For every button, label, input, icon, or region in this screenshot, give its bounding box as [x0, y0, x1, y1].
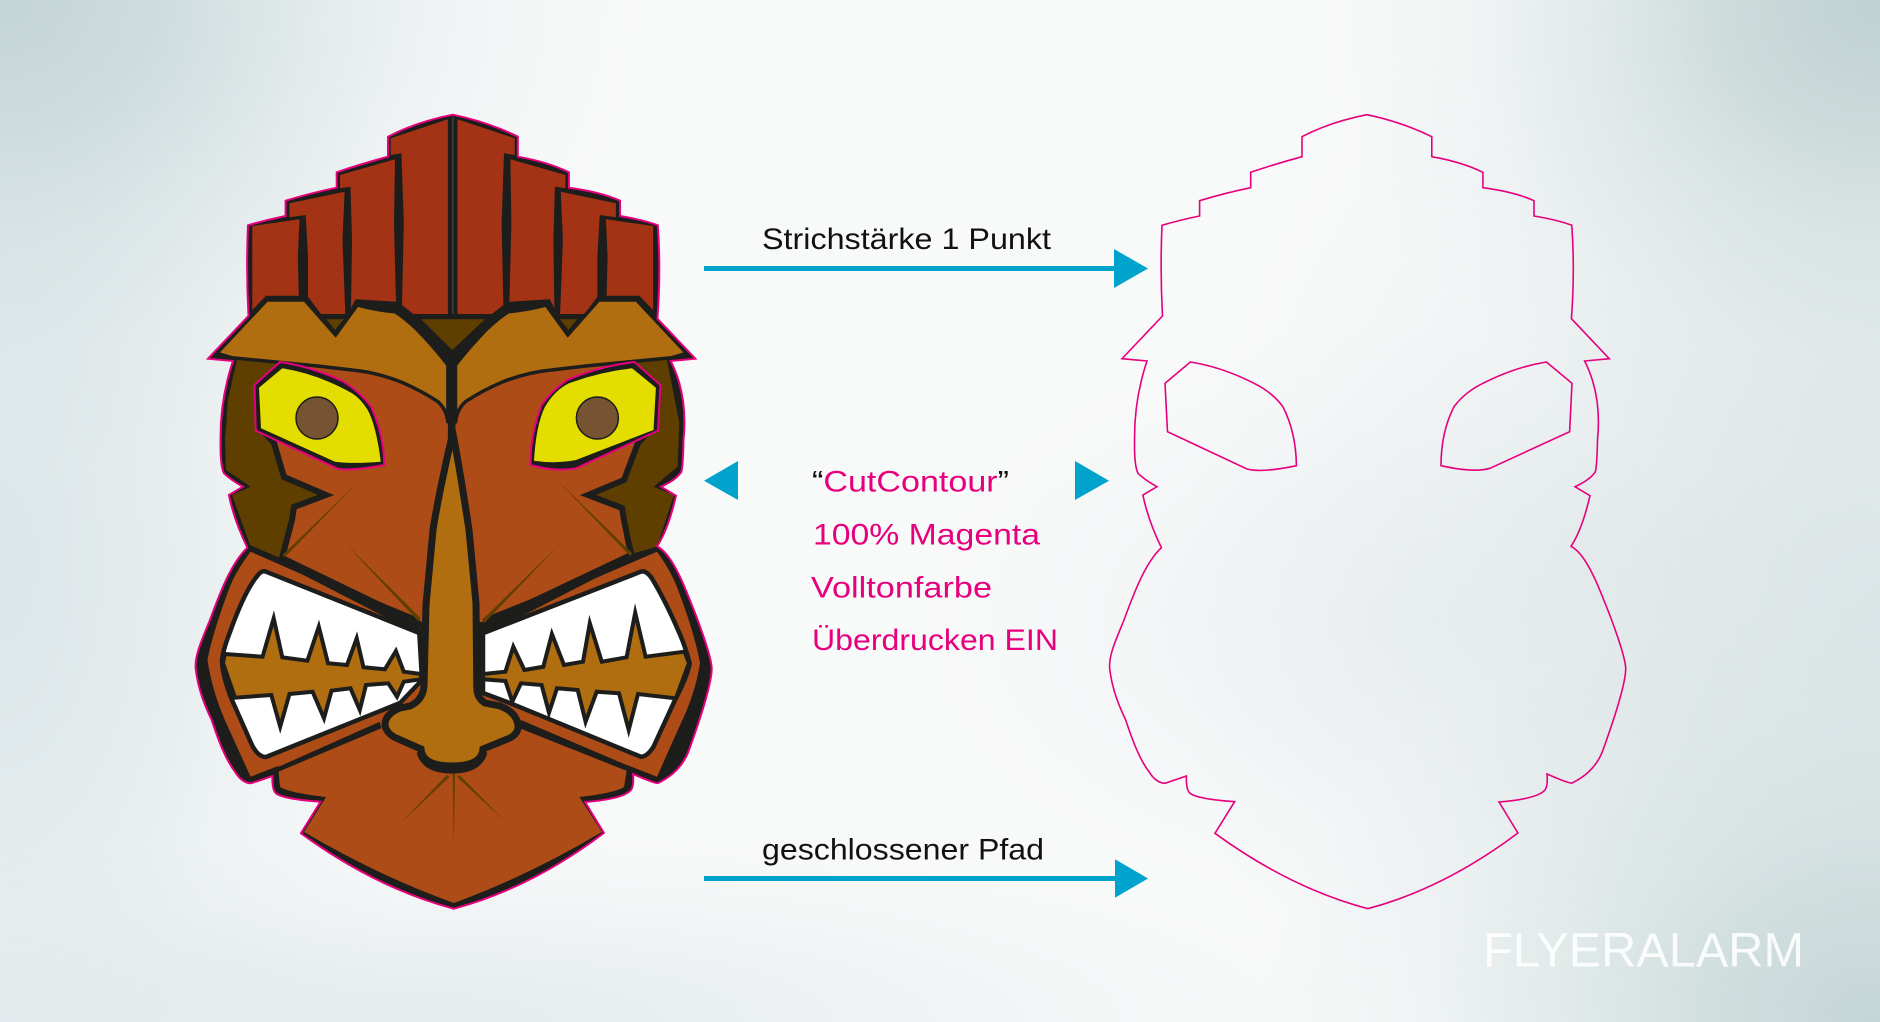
right teeth and tongue: [483, 613, 689, 730]
nose tip shadow: [419, 752, 485, 771]
right eye contour: [1441, 362, 1572, 470]
crown feathers: [252, 117, 653, 314]
right cheek plate: [483, 548, 700, 778]
CutContour specification text: [811, 466, 1058, 657]
label: Volltonfarbe: Volltonfarbe: [811, 571, 992, 604]
left eye: [254, 362, 384, 470]
label: 100% Magenta: 100% Magenta: [813, 518, 1040, 551]
arrow: closed path to outline: [704, 859, 1148, 898]
face: [262, 362, 650, 625]
label: CutContour: “CutContour ”: [812, 466, 1009, 499]
mask black silhouette: [196, 115, 712, 909]
left eye contour: [1165, 362, 1296, 470]
label: geschlossener Pfad: geschlossener Pfad: [762, 833, 1044, 866]
left pointing arrow: [704, 461, 738, 500]
label: Strichstärke 1 Punkt: Strichstärke 1 Punkt: [762, 223, 1052, 256]
cut contour outline: [1110, 115, 1626, 909]
mask magenta contour: [196, 115, 712, 909]
tiki mask with cut contour: [196, 115, 712, 909]
chin: [278, 690, 628, 903]
nose: [385, 434, 518, 766]
outer contour path: [1110, 115, 1626, 909]
wrinkle lines: [282, 480, 632, 845]
left teeth and tongue: [223, 618, 421, 727]
right headband: [454, 300, 687, 423]
label: Überdrucken EIN: Überdrucken EIN: [812, 624, 1058, 657]
right hair: [588, 360, 679, 553]
small brown triangles under headband: [326, 319, 577, 350]
left headband: [217, 300, 449, 423]
right pointing arrow: [1075, 461, 1109, 500]
right mouth: [483, 571, 690, 757]
centre brow line: [448, 330, 456, 445]
right eye: [531, 362, 660, 470]
arrow: stroke weight to outline: [704, 249, 1148, 288]
left hair: [225, 360, 326, 558]
left cheek plate: [208, 548, 422, 778]
FLYERALARM logo: FLYERALARM: [1483, 925, 1804, 978]
left mouth: [222, 571, 422, 757]
